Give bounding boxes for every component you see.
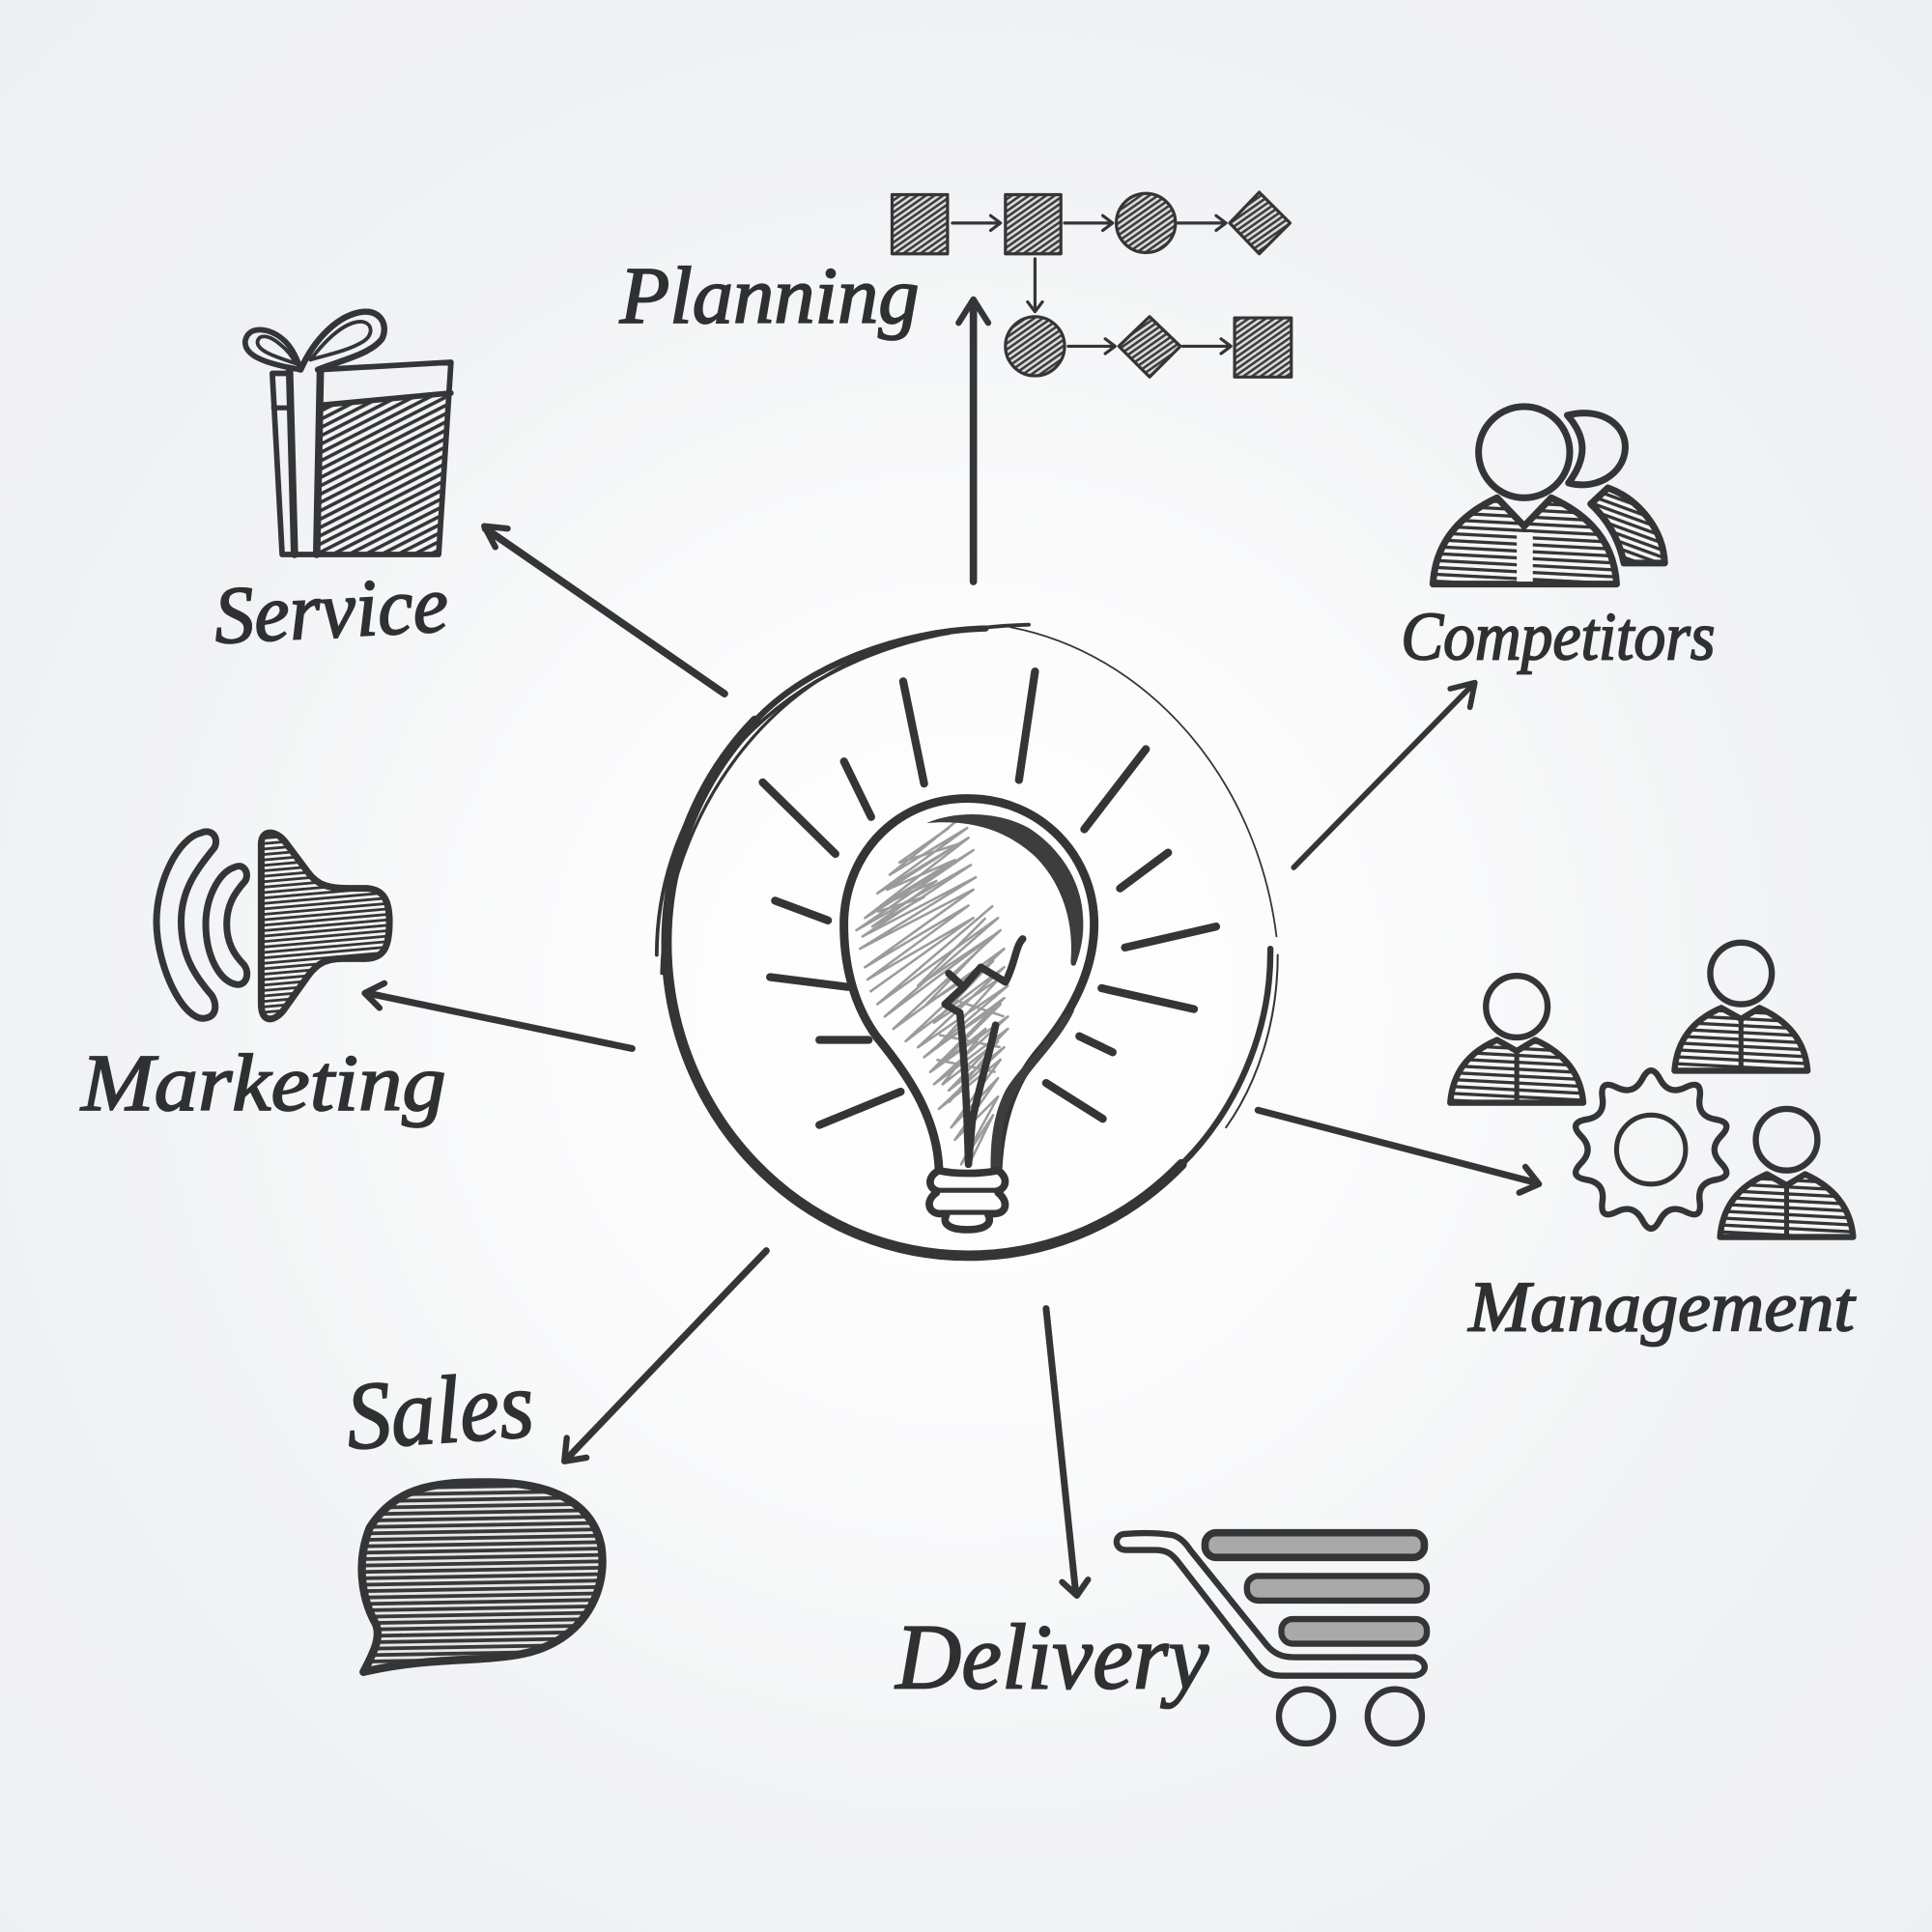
rays around bulb xyxy=(763,671,1216,1125)
icon: competitors people xyxy=(1433,407,1664,584)
bulb inner highlight xyxy=(926,814,1083,966)
icon: gift box xyxy=(245,312,451,554)
icon: shopping cart xyxy=(1117,1533,1427,1744)
label: Competitors: Competitors xyxy=(1401,598,1716,674)
label: Marketing: Marketing xyxy=(80,1038,446,1128)
arrow: to delivery xyxy=(1046,1309,1088,1596)
infographic canvas xyxy=(79,190,1857,1747)
label: Management: Management xyxy=(1467,1268,1857,1348)
person top right xyxy=(1674,943,1807,1070)
bow xyxy=(245,329,300,370)
light bulb xyxy=(844,799,1094,1230)
label: Planning: Planning xyxy=(619,251,920,341)
screw base xyxy=(929,1171,1006,1230)
bulb thick lower right edge xyxy=(991,1010,1074,1168)
arrow: to marketing xyxy=(365,983,632,1048)
bulb shading scribble xyxy=(856,819,1008,1168)
gear xyxy=(1576,1070,1726,1229)
label: Delivery: Delivery xyxy=(894,1605,1209,1708)
back person xyxy=(1567,413,1625,485)
icon: speech bubble xyxy=(362,1482,603,1672)
front person xyxy=(1479,407,1570,497)
arrow: to management xyxy=(1258,1110,1539,1193)
arrow: to sales xyxy=(564,1251,766,1462)
filament xyxy=(945,939,1023,1164)
arrow: to competitors xyxy=(1293,683,1475,867)
icon: speaker xyxy=(156,832,389,1019)
label: Service: Service xyxy=(212,559,450,662)
arrow: to service xyxy=(484,526,724,694)
icon: flowchart xyxy=(892,192,1292,377)
arrow: to planning xyxy=(958,299,988,582)
person bottom right xyxy=(1720,1109,1853,1237)
label: Sales: Sales xyxy=(343,1350,537,1470)
person left xyxy=(1450,976,1583,1103)
icon: management team xyxy=(1450,943,1853,1237)
central circle xyxy=(657,625,1278,1256)
box hatched face xyxy=(318,394,446,554)
bulb glass outline xyxy=(844,799,1094,1168)
